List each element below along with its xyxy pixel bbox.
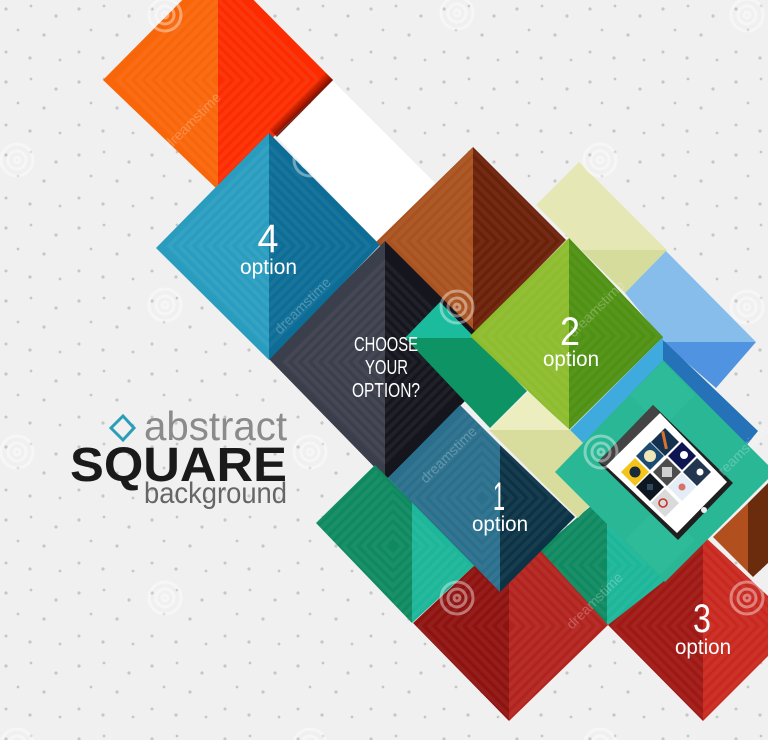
label: option 1: option (472, 513, 528, 536)
square: mid green (541, 506, 664, 625)
icon: tablet (598, 405, 733, 540)
label: option 4 (240, 217, 297, 279)
square: small green (405, 302, 527, 428)
icon: diamond outline (111, 416, 134, 440)
title: square: SQUARE (70, 439, 287, 492)
label: option 4: option (240, 256, 297, 279)
watermarks: dreamstime (565, 277, 628, 340)
text: choose your option (352, 334, 420, 402)
label: option 3: option (675, 636, 731, 659)
label: option 2: option (543, 348, 599, 371)
label: option 2: 2 (560, 310, 580, 354)
square: light blue (625, 251, 756, 388)
square: brown right (713, 483, 768, 577)
square: brown (376, 147, 566, 331)
label: option 3 (675, 597, 731, 659)
label: option 2 (543, 310, 599, 371)
title block (70, 403, 288, 510)
text: choose your option: OPTION? (352, 380, 420, 402)
watermarks: dreamstime (161, 89, 224, 152)
square: blue option 4 (156, 133, 380, 360)
watermarks: dreamstime (271, 274, 334, 337)
label: option 1: 1 (493, 475, 505, 519)
strip: cyan blue (570, 337, 758, 446)
watermarks: dreamstime (563, 569, 626, 632)
label: option 4: 4 (258, 217, 278, 261)
band: white (277, 81, 437, 244)
title: abstract: abstract (144, 403, 288, 449)
label: option 3: 3 (693, 597, 711, 641)
text: choose your option: YOUR (365, 357, 408, 379)
label: option 1 (472, 475, 528, 536)
square: green option 2 (469, 236, 669, 436)
square: green lower left (316, 465, 474, 623)
square: red middle (413, 551, 608, 721)
square: dark, choose your option (270, 241, 475, 478)
panel: teal tablet square (555, 360, 768, 582)
icon grid: tablet tiles (621, 428, 711, 517)
title: background: background (144, 477, 287, 510)
watermarks: dreamstime (417, 423, 480, 486)
square: orange and red (103, 0, 333, 190)
text: choose your option: CHOOSE (354, 334, 418, 356)
square: pale yellow lower (489, 392, 595, 518)
square: blue option 1 (388, 405, 575, 592)
square: red option 3 (608, 539, 768, 721)
square: pale yellow upper (536, 162, 667, 293)
